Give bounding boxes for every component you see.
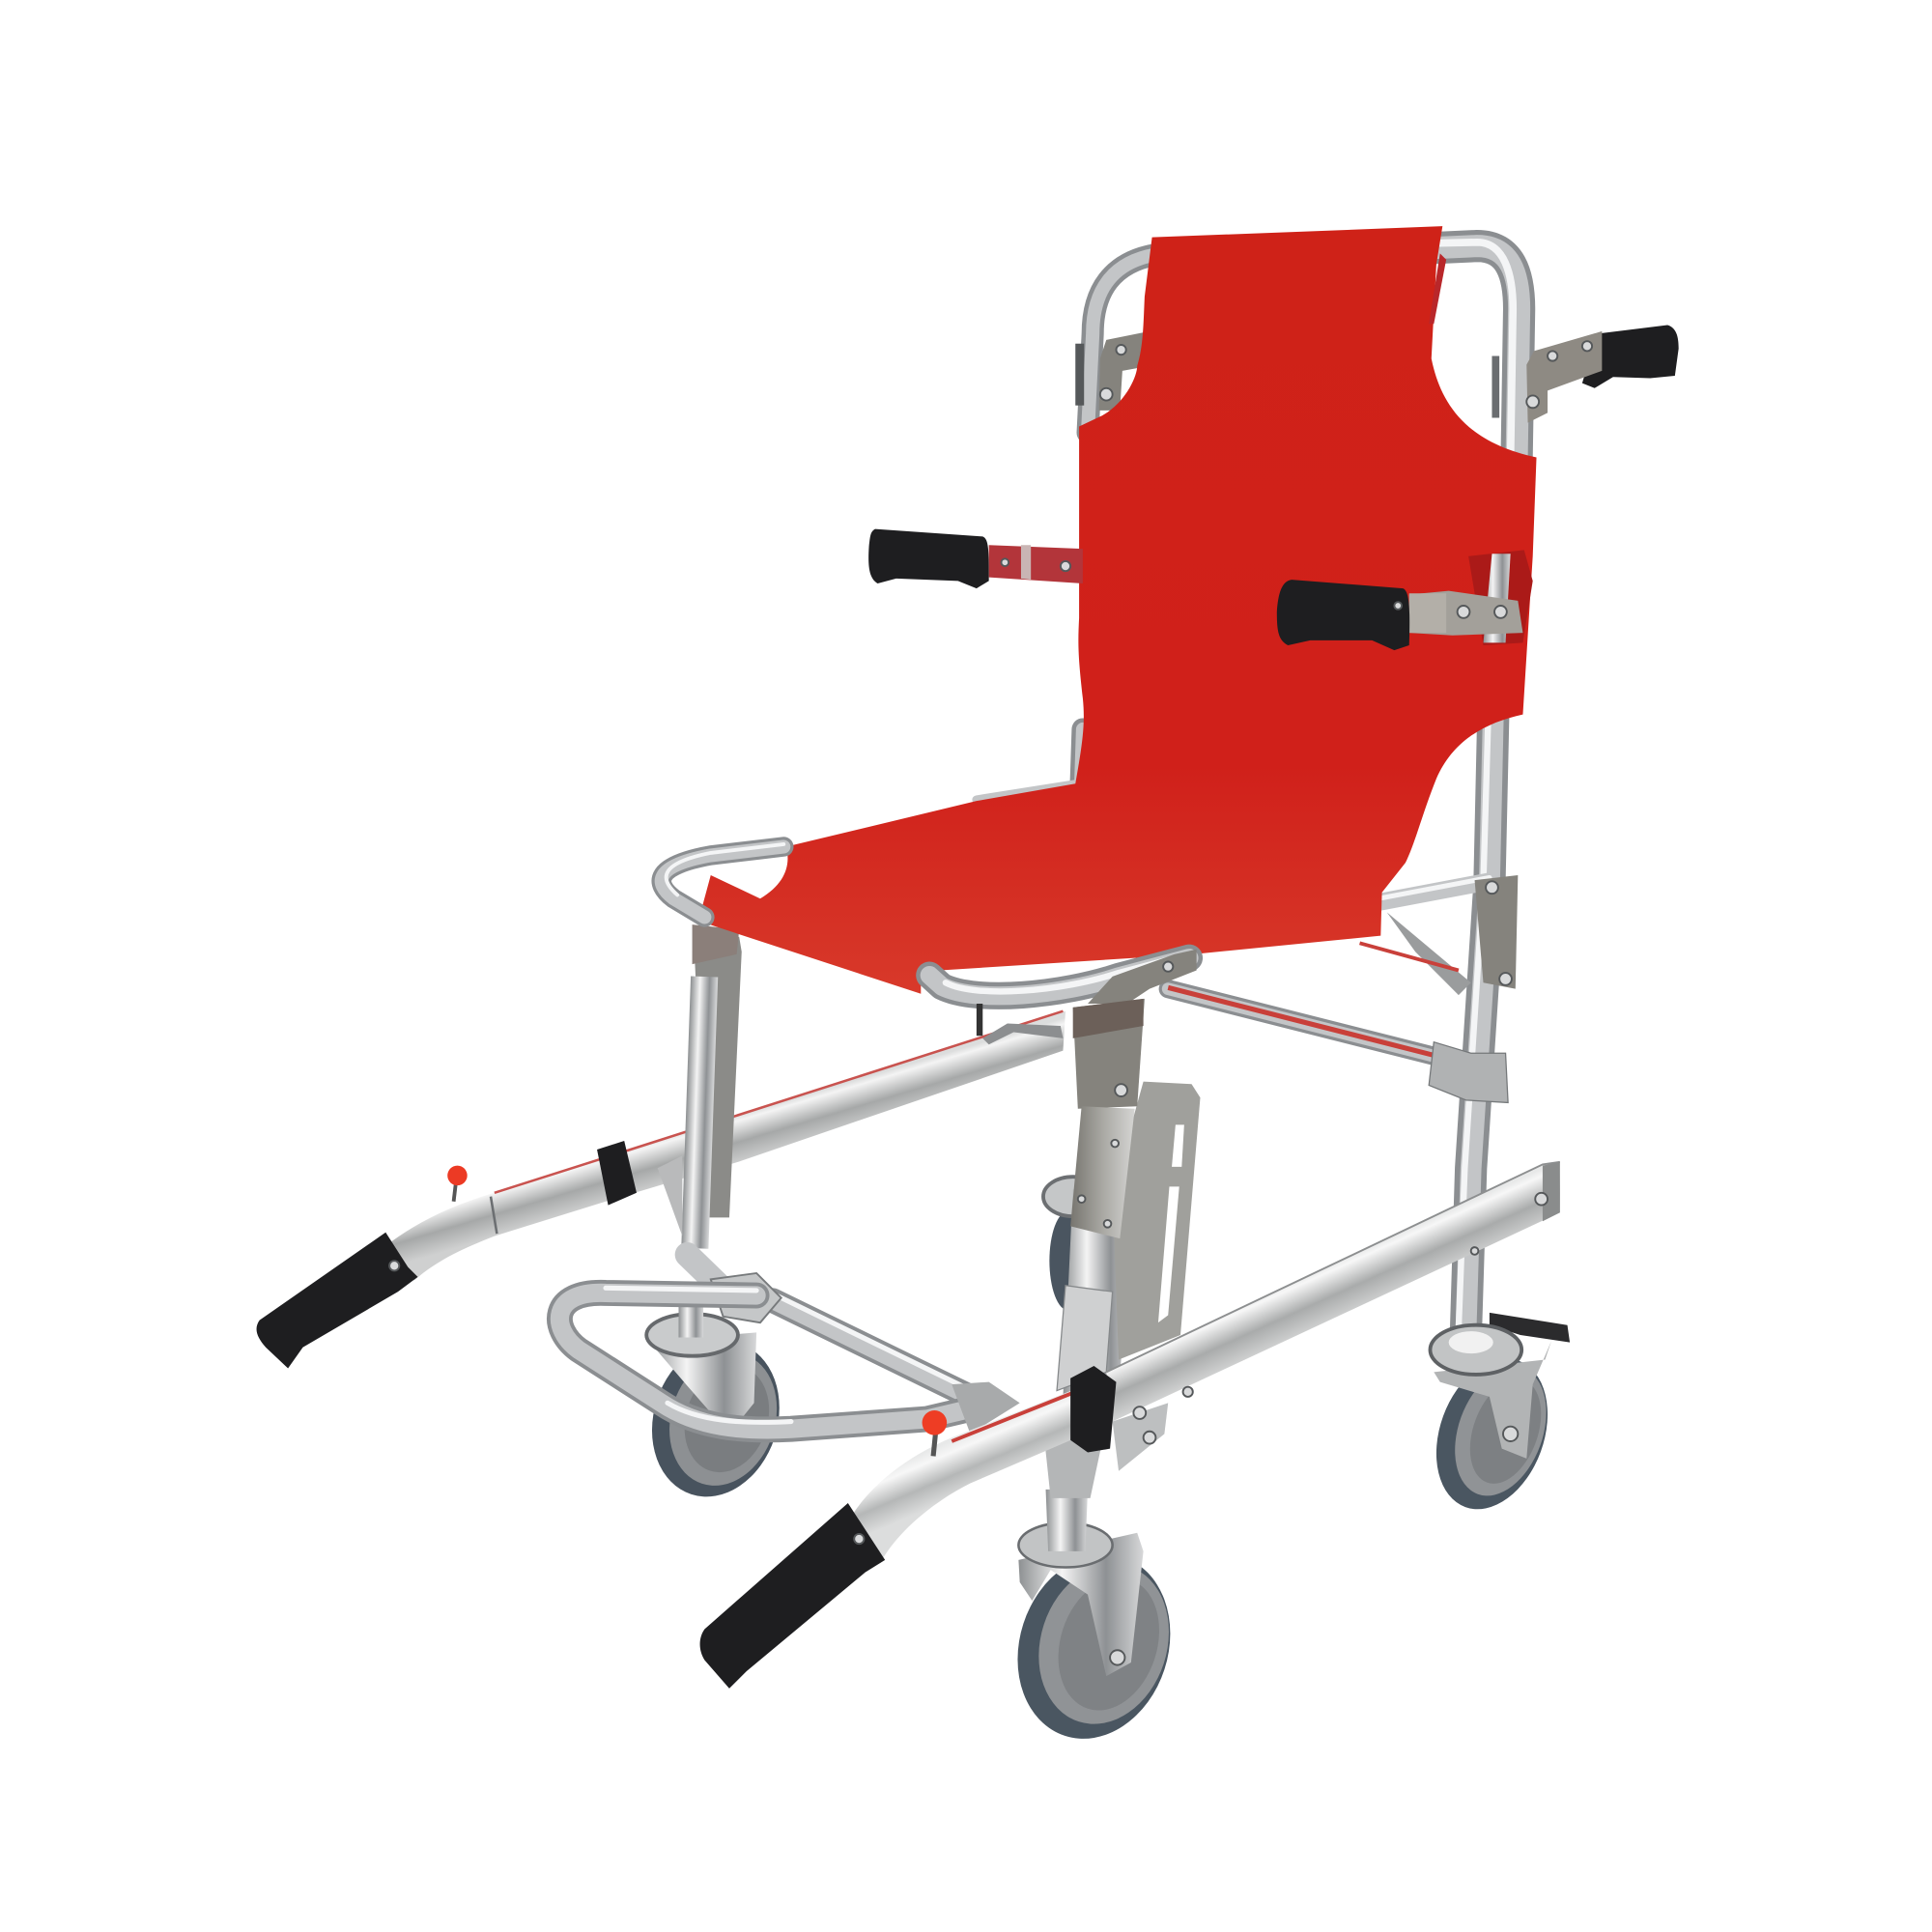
- upper left handle bracket: [1075, 331, 1150, 411]
- far seat tube rail: [977, 783, 1078, 800]
- seat front hinge bracket: [1088, 950, 1197, 1004]
- rear right upright leg: [1459, 717, 1493, 1329]
- far knob: [447, 1166, 468, 1202]
- fabric strap behind top: [1429, 253, 1446, 324]
- mid right handle in fabric cutout: [1277, 550, 1533, 650]
- near clip: [1070, 1366, 1116, 1453]
- fabric seat and back: [698, 226, 1537, 994]
- mid left handle: [868, 529, 1083, 588]
- cross tube between legs: [1168, 987, 1508, 1102]
- near handle section of rail: [850, 1388, 1085, 1564]
- far left wheel with fork: [633, 1286, 799, 1514]
- footrest joint stem: [687, 1255, 781, 1322]
- plate slot lower: [1158, 1186, 1179, 1322]
- far front leg: [658, 924, 742, 1249]
- rear wheel with caster brake: [1416, 1313, 1570, 1524]
- seat rear tube: [662, 844, 783, 917]
- bracket under near rail: [1113, 1403, 1168, 1471]
- upper right handle: [1492, 326, 1679, 423]
- back frame tube: [1080, 242, 1520, 804]
- near knob: [923, 1410, 947, 1456]
- plate slot upper: [1172, 1124, 1184, 1167]
- near handle: [700, 1503, 885, 1689]
- far middle wheel: [1043, 1177, 1102, 1310]
- rear seat strut and hinge: [1360, 875, 1518, 995]
- near long rail: [1106, 1162, 1560, 1422]
- far handle: [257, 1233, 418, 1369]
- near front wheel: [994, 1534, 1194, 1759]
- far side clip: [597, 1141, 637, 1206]
- footrest cross tube: [773, 1295, 974, 1397]
- footrest U tube: [559, 1288, 1020, 1434]
- near rail reflection: [952, 1392, 1075, 1441]
- far side rail: [385, 1011, 1065, 1281]
- zipper tag: [977, 1004, 982, 1036]
- near front wheel fork: [1018, 1440, 1144, 1676]
- seat front tube: [929, 954, 1189, 996]
- near front leg with plate: [1057, 999, 1200, 1397]
